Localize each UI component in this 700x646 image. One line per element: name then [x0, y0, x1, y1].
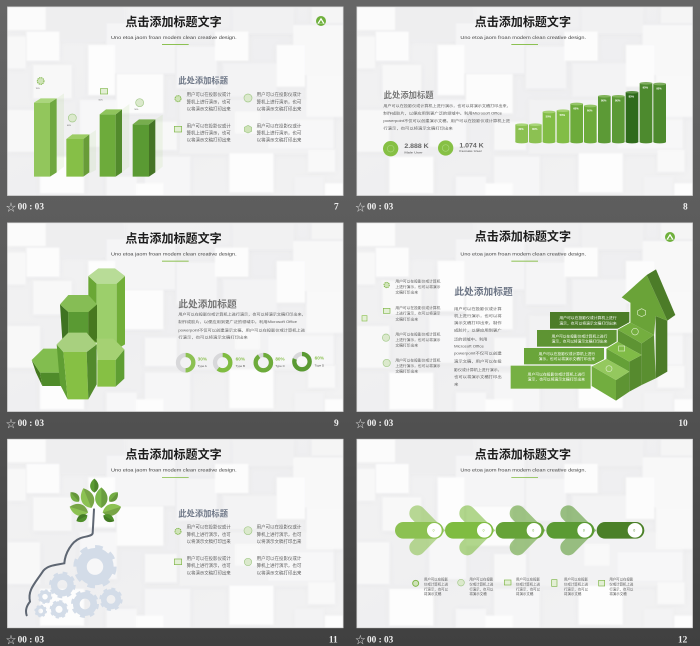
slide 7 features: 以将演示文稿打印出来: [257, 137, 302, 144]
front hexagon: [57, 333, 97, 399]
slide 8 footer: 8: [683, 203, 688, 213]
slide 8 title: 点击添加标题文字: [475, 14, 571, 29]
slide 11 title: 点击添加标题文字: [125, 447, 222, 462]
donut Type B: 60%: [236, 356, 246, 361]
arrow 1: [395, 513, 443, 547]
cylinder bar chart: 80%: [601, 98, 607, 102]
left feature list: 用户可以在投影仪或计算机: [395, 278, 441, 283]
arrow 2: [445, 513, 493, 547]
cylinder bar chart: 30%: [532, 127, 538, 131]
left feature list: [382, 278, 441, 374]
process descriptions: 行演示，也可以: [609, 586, 634, 591]
slide 8 body text: 用户可以在投影仪或计算机上进行演示，也可以将演示文稿打印出来，: [383, 103, 511, 108]
slide 7 title underline: [162, 43, 189, 46]
gears: [36, 549, 120, 617]
tall hexagon: [88, 268, 125, 349]
bar icons and labels: [36, 78, 144, 127]
slide 7 features: 算机上进行演示，也可: [187, 98, 231, 105]
left feature list: 文稿打印出来: [395, 369, 418, 374]
bar 3: [100, 109, 122, 177]
dark hexagon: [60, 295, 97, 343]
cylinder bar chart: 80%: [615, 98, 621, 102]
slide 10 body column: 演示文稿，用户可以在投: [454, 359, 502, 364]
process descriptions: 仪或计算机上进: [564, 581, 588, 586]
cylinder bar chart: [515, 82, 666, 143]
slide 10 subtitle: Uno etoa jaom froan modem clean creative design.: [460, 251, 586, 256]
step text bands: 演示，也可以将演示文稿打印出来: [528, 377, 585, 382]
female user stat: Female User: [459, 149, 482, 153]
slide 10 body column: 泛的领域中。利用: [454, 337, 488, 342]
slide 10: stair arrow: [355, 223, 693, 430]
slide 12 footer: [355, 634, 688, 646]
cylinder bar chart: 50%: [546, 114, 552, 118]
male user stat: Male User: [404, 150, 423, 154]
slide 8 heading: 此处添加标题: [384, 90, 434, 100]
slide 10 footer: [355, 418, 688, 430]
left feature list: 文稿打印出来: [395, 290, 418, 295]
slide 7 features: 算机上进行演示，也可: [257, 98, 302, 105]
left feature list: 上进行演示，也可以将演示: [395, 311, 441, 316]
process descriptions: 仪或计算机上进: [424, 581, 448, 586]
slide 9 background: [7, 223, 343, 412]
slide 10 body column: 用户可以在投影仪或计算: [454, 306, 502, 311]
slide 11 features: [174, 524, 302, 576]
slide 11 heading: 此处添加标题: [178, 509, 229, 519]
slide 9 footer: 00 : 03: [18, 419, 44, 429]
slide 11 features: 用户可以在投影仪或计: [257, 555, 302, 562]
slide 12 title underline: [511, 476, 538, 479]
slide 7 features: 用户可以在投影仪或计: [187, 91, 231, 98]
arrow 5: [597, 522, 644, 539]
cylinder bar chart: 30%: [518, 127, 524, 131]
slide 11 features: 算机上进行演示，也可: [257, 531, 302, 538]
leaves: [68, 479, 123, 524]
step text bands: [511, 312, 629, 389]
slide 8 body text: powerpoint不仅可以创建演示文稿，用户可以在投影仪或计算机上进: [383, 118, 510, 123]
cylinder bar chart: 60%: [573, 106, 579, 110]
right hexagon: [97, 339, 124, 387]
cylinder bar chart: 95%: [656, 86, 662, 90]
slide 8 footer: 00 : 03: [367, 203, 394, 213]
slide 7 footer: ☆: [6, 202, 16, 214]
arrow 4: [546, 513, 594, 547]
process descriptions: 仪或计算机上进: [516, 581, 540, 586]
slide 7 features: 用户可以在投影仪或计: [257, 122, 302, 129]
slide 11 features: 用户可以在投影仪或计: [187, 524, 231, 531]
slide 7 features: 以将演示文稿打印出来: [257, 105, 302, 112]
donut Type C: Type C: [275, 364, 286, 368]
arrow 3: [496, 513, 544, 547]
left hexagon: [32, 349, 63, 386]
arrow 2: 0: [483, 528, 485, 532]
slide 8 background: [357, 7, 693, 196]
step text bands: 演示，也可以将演示文稿打印出来: [559, 320, 617, 325]
process descriptions: 将演示文稿: [564, 591, 582, 596]
slide 9 body text: powerpoint不仅可以创建演示文稿，用户可以在投影仪或计算机上进: [178, 327, 305, 332]
slide 10 body column: Microsoft Office: [454, 345, 484, 349]
step text bands: 用户可以在投影仪或计算机上进行: [559, 315, 617, 320]
process descriptions: 将演示文稿: [516, 591, 534, 596]
slide 10 footer: 10: [678, 419, 688, 429]
slide 8 subtitle: Uno etoa jaom froan modem clean creative design.: [460, 35, 586, 40]
slide 10 title: 点击添加标题文字: [475, 228, 571, 243]
slide 8: cylinder chart: [355, 7, 693, 214]
slide 9 footer: [6, 418, 339, 430]
slide 11 features: 以将演示文稿打印出来: [187, 569, 231, 576]
3D bar chart: [34, 93, 163, 177]
process descriptions: 将演示文稿: [424, 591, 442, 596]
cylinder bar chart: 95%: [643, 86, 649, 90]
male user stat: [383, 141, 429, 156]
slide 9 body text: 制作成胶片，以便应用到更广泛的领域中。利用Microsoft Office: [178, 319, 297, 324]
slide 12 background: [357, 439, 693, 628]
slide 7 title: 点击添加标题文字: [125, 14, 222, 29]
slide 11 footer: 00 : 03: [18, 635, 44, 645]
slide 12 subtitle: Uno etoa jaom froan modem clean creative design.: [460, 468, 586, 473]
arrow 1: 0: [433, 528, 435, 532]
slide 10 body column: 也可以将演示文稿打印出: [454, 374, 502, 379]
slide 7 features: 算机上进行演示，也可: [187, 129, 231, 136]
slide 9 body text: 用户可以在投影仪或计算机上进行演示，也可以将演示文稿打印出来，: [178, 312, 306, 317]
slide 7 features: 用户可以在投影仪或计: [187, 122, 231, 129]
arrow 5: 0: [633, 528, 635, 532]
slide 7 features: 算机上进行演示，也可: [257, 129, 302, 136]
slide 8 body text: 制作成胶片，以便应用到更广泛的领域中。利用Microsoft Office: [383, 110, 502, 115]
logo: [316, 16, 326, 26]
slide 11 background: [7, 439, 343, 628]
donut Type C: [256, 355, 286, 370]
slide 8 footer: ☆: [355, 202, 365, 214]
cylinder bar chart: 50%: [560, 113, 566, 117]
slide 10 heading: 此处添加标题: [454, 286, 513, 298]
process descriptions: 仪或计算机上进: [609, 581, 634, 586]
slide 10 body column: 成胶片，以便应用到更广: [454, 327, 502, 332]
process descriptions: 将演示文稿: [609, 591, 627, 596]
slide 10 title underline: [511, 260, 538, 263]
slide 9 footer: 9: [334, 419, 339, 429]
slide 7 background: [7, 7, 343, 196]
slide 10 footer: ☆: [355, 418, 365, 430]
left feature list: 文稿打印出来: [395, 316, 418, 321]
slide 9 footer: ☆: [6, 418, 16, 430]
female user stat: 1.074 K: [459, 142, 484, 149]
left feature list: 上进行演示，也可以将演示: [395, 363, 441, 368]
slide 7 features: 用户可以在投影仪或计: [257, 91, 302, 98]
slide 12 title: 点击添加标题文字: [475, 447, 571, 462]
process descriptions: 将演示文稿: [469, 591, 487, 596]
slide 11 features: 用户可以在投影仪或计: [187, 555, 231, 562]
female user stat: [438, 140, 484, 156]
arrow 3: 0: [532, 528, 534, 532]
slide 11 features: 算机上进行演示，也可: [187, 562, 231, 569]
slide 7 footer: 00 : 03: [18, 203, 44, 213]
slide 12 footer: 12: [678, 635, 688, 645]
slide 10 body column: [454, 306, 502, 386]
step text bands: 演示，也可以将演示文稿打印出来: [539, 356, 595, 361]
process descriptions: 用户可以在投影: [424, 576, 448, 581]
left feature list: 用户可以在投影仪或计算机: [395, 357, 441, 362]
slide 7 footer: 7: [334, 203, 339, 213]
slide 7 footer: [6, 202, 339, 214]
slide 10 background: [357, 223, 693, 412]
slide 9 heading: 此处添加标题: [178, 298, 237, 310]
left feature list: 用户可以在投影仪或计算机: [395, 331, 441, 336]
left feature list: 上进行演示，也可以将演示: [395, 284, 441, 289]
slide 11 footer: 11: [329, 635, 338, 645]
donut Type C: 80%: [275, 356, 286, 361]
slide 8 footer: [355, 202, 688, 214]
gear tree illustration: [26, 479, 123, 617]
donut Type D: 60%: [315, 356, 325, 361]
slide 11 features: 用户可以在投影仪或计: [257, 524, 302, 531]
bar 2: [66, 134, 89, 177]
process descriptions: 行演示，也可以: [564, 586, 588, 591]
bar icons and labels: 60%: [99, 99, 103, 101]
slide 9 subtitle: Uno etoa jaom froan modem clean creative design.: [111, 251, 237, 256]
donut Type D: [294, 354, 325, 369]
process descriptions: 行演示，也可以: [469, 586, 494, 591]
donut Type A: 30%: [198, 356, 208, 361]
slide 12 footer: 00 : 03: [367, 635, 394, 645]
slide 12: arrow process: [355, 439, 693, 646]
cylinder bar chart: 85%: [629, 95, 635, 99]
slide 7 features: [174, 91, 302, 144]
donut Type A: Type A: [198, 364, 207, 368]
side icon: [362, 316, 367, 321]
hexagon column graphic: [32, 268, 125, 399]
donut Type B: Type B: [236, 364, 245, 368]
left feature list: 上进行演示，也可以将演示: [395, 337, 441, 342]
process descriptions: 仪或计算机上进: [469, 581, 494, 586]
step text bands: 用户可以在投影仪或计算机上进行: [528, 371, 585, 376]
process descriptions: 用户可以在投影: [564, 576, 588, 581]
slide 7: 3D bar chart: [6, 7, 343, 214]
slide 9 body text: [178, 312, 306, 340]
arrow process row: [395, 513, 644, 547]
slide 8 body text: [383, 103, 511, 130]
slide 11 features: 以将演示文稿打印出来: [187, 538, 231, 545]
slide 7 features: 以将演示文稿打印出来: [187, 137, 231, 144]
donut Type B: [215, 355, 246, 370]
slide 10 body column: 来: [454, 382, 459, 386]
male user stat: 2.888 K: [404, 143, 429, 150]
process descriptions: 用户可以在投影: [469, 576, 494, 581]
process descriptions: 行演示，也可以: [516, 586, 540, 591]
slide 8 title underline: [511, 43, 538, 46]
step text bands: 用户可以在投影仪或计算机上进行: [552, 333, 608, 338]
left feature list: 用户可以在投影仪或计算机: [395, 305, 441, 310]
slide 10 footer: 00 : 03: [367, 419, 394, 429]
tree stem: [26, 509, 94, 615]
slide 11 title underline: [162, 476, 189, 479]
slide 9 body text: 行演示，也可以将演示文稿打印出来: [178, 335, 248, 340]
step text bands: 用户可以在投影仪或计算机上进行: [539, 351, 595, 356]
slide 11: gear tree: [6, 439, 343, 646]
bar 1: [34, 98, 57, 177]
bar icons and labels: 70%: [36, 88, 40, 90]
donut Type A: [178, 355, 208, 370]
donut Type D: Type D: [315, 363, 325, 367]
logo: [665, 232, 675, 242]
process descriptions: [413, 576, 634, 596]
slide 10 body column: 影仪或计算机上进行演示，: [454, 367, 502, 372]
process descriptions: 用户可以在投影: [516, 576, 540, 581]
step text bands: 演示，也可以将演示文稿打印出来: [552, 339, 608, 344]
process descriptions: 行演示，也可以: [424, 586, 448, 591]
slide 7 features: 以将演示文稿打印出来: [187, 105, 231, 112]
slide 10 body column: 演示文稿打印出来，制作: [454, 320, 502, 325]
slide 7 subtitle: Uno etoa jaom froan modem clean creative design.: [111, 35, 237, 40]
slide 8 body text: 行演示，也可以将演示文稿打印出来: [383, 125, 453, 130]
slide 11 features: 算机上进行演示，也可: [187, 531, 231, 538]
stair arrow: [592, 269, 675, 401]
slide 9 title: 点击添加标题文字: [125, 230, 222, 245]
process descriptions: 用户可以在投影: [609, 576, 634, 581]
slide 10 body column: powerpoint不仅可以创建: [454, 351, 502, 356]
left feature list: 文稿打印出来: [395, 343, 418, 348]
bar 4: [133, 119, 155, 177]
slide 11 features: 以将演示文稿打印出来: [257, 538, 302, 545]
slide 7 heading: 此处添加标题: [178, 76, 229, 86]
slide 9: hexagon columns: [6, 223, 343, 430]
bar icons and labels: 50%: [134, 109, 139, 111]
slide 11 features: 算机上进行演示，也可: [257, 562, 302, 569]
cylinder bar chart: 60%: [587, 108, 593, 112]
slide 9 title underline: [162, 260, 189, 263]
slide 10 body column: 机上进行演示，也可以将: [454, 313, 502, 318]
bar icons and labels: 40%: [67, 125, 71, 127]
slide 11 footer: [6, 634, 338, 646]
arrow 4: 0: [583, 528, 585, 532]
slide 11 features: 以将演示文稿打印出来: [257, 569, 302, 576]
slide 11 subtitle: Uno etoa jaom froan modem clean creative design.: [111, 468, 237, 473]
